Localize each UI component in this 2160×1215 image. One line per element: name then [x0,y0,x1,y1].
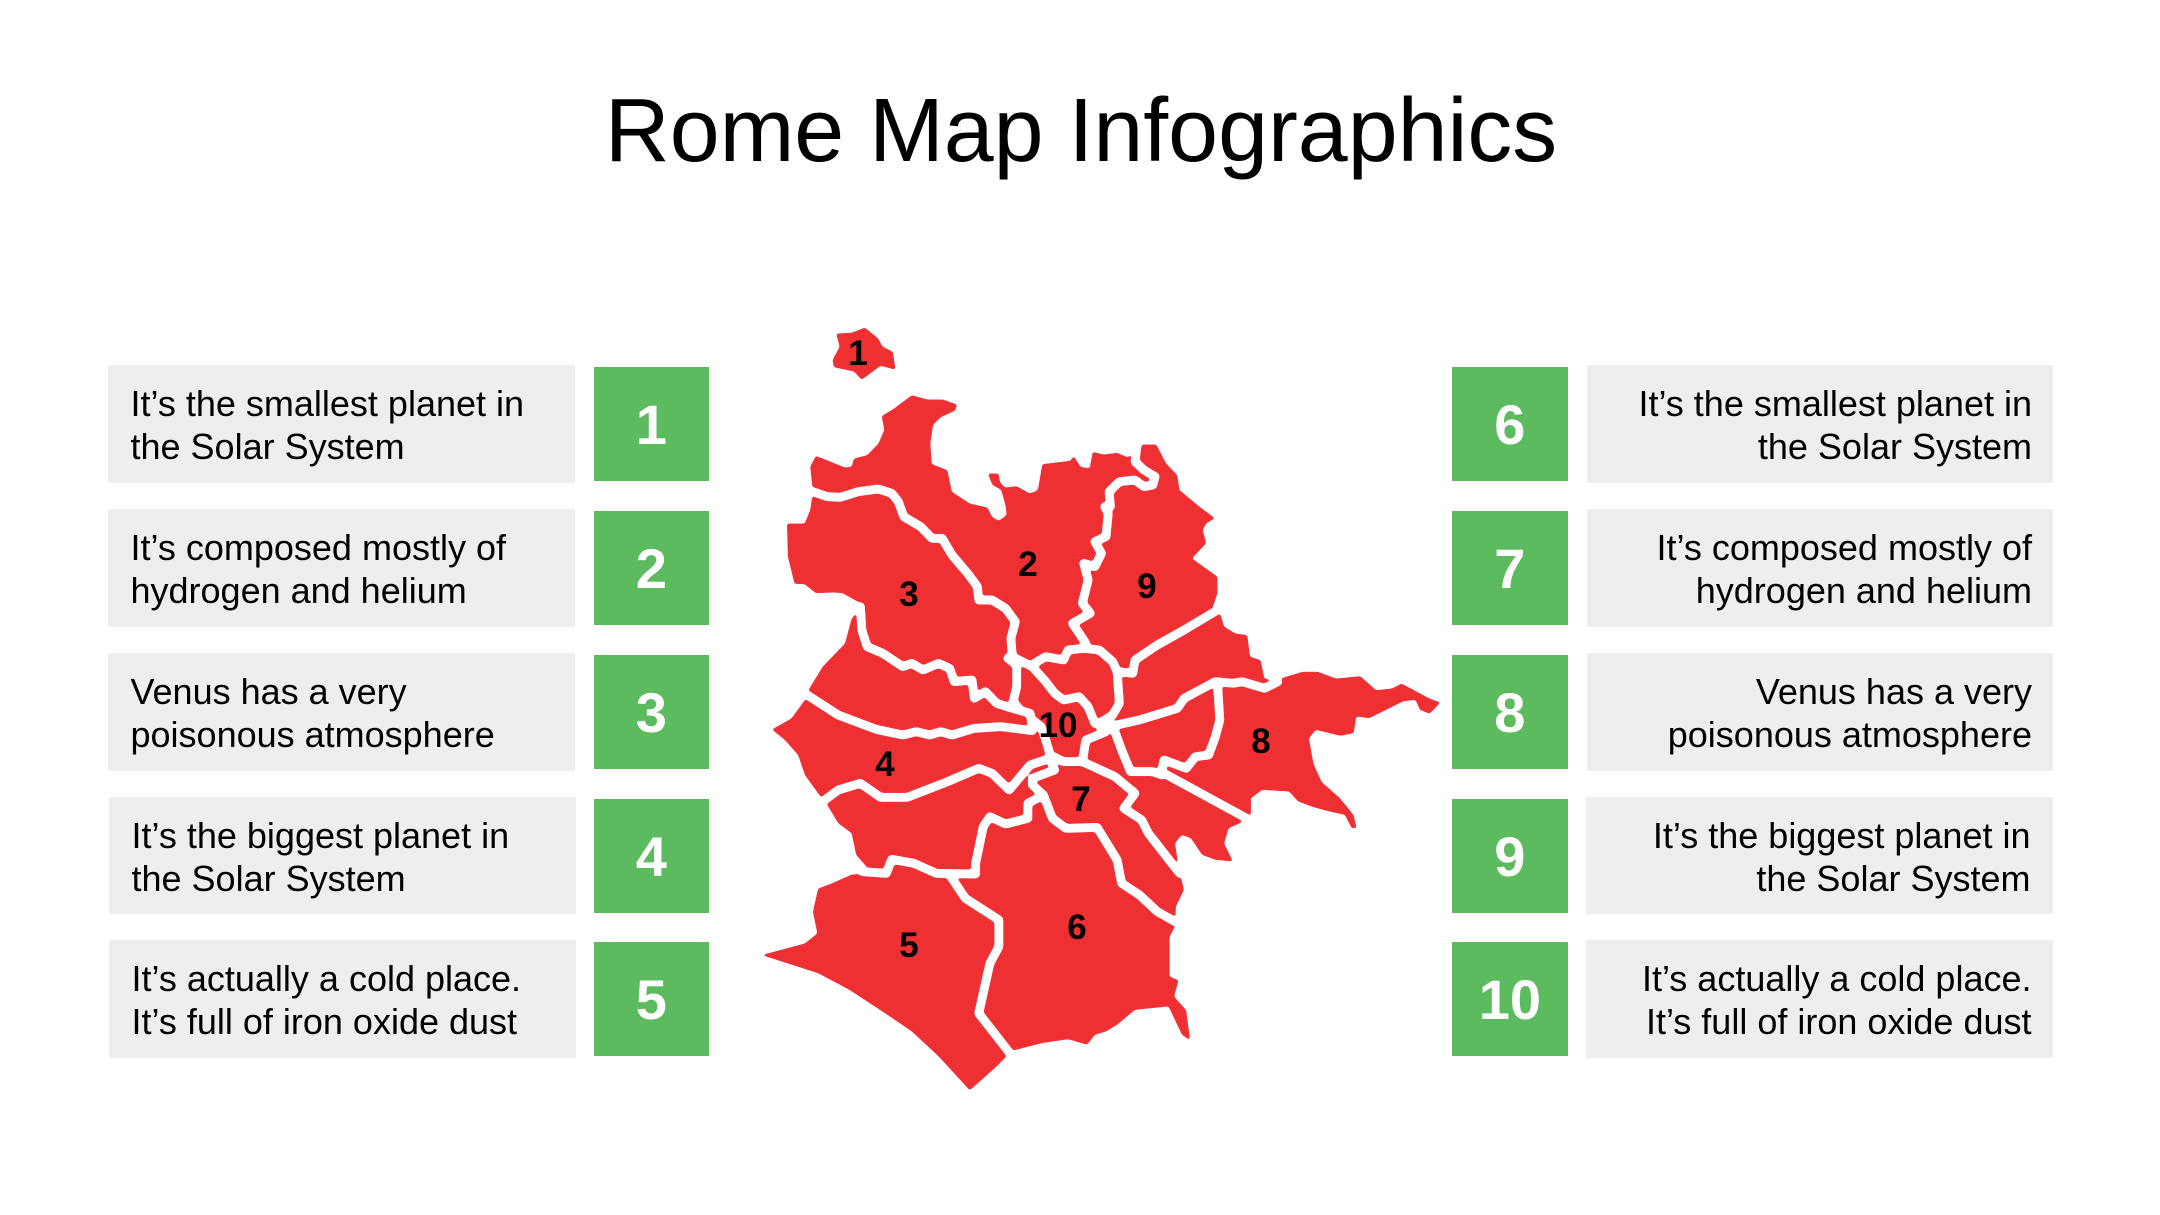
right item 6 [1452,365,2053,483]
text panel 8: Venus has a very poisonous atmosphere [1668,671,2032,755]
number badge 6: 6 [1494,393,1525,456]
number badge 7 [1452,511,1568,625]
text panel 2: It’s composed mostly of hydrogen and helium [130,527,506,611]
text panel 4: It’s the biggest planet in the Solar System [132,815,509,899]
map regions [740,300,1470,1120]
number badge 10: 10 [1479,968,1541,1031]
map district numbers [848,334,1271,965]
left item 3 [108,653,709,771]
text panel 3: Venus has a very poisonous atmosphere [130,671,495,755]
number badge 4 [594,798,709,912]
right item 8 [1452,653,2053,771]
map district numbers: 9 [1137,567,1157,606]
left item 4 [109,797,709,914]
number badge 2: 2 [636,537,667,600]
number badge 9: 9 [1494,824,1525,888]
map district numbers: 2 [1018,545,1038,584]
text panel 7: It’s composed mostly of hydrogen and helium [1656,527,2032,611]
number badge 1 [594,367,709,481]
text panel 8 [1587,653,2052,770]
number badge 3 [594,655,709,769]
text panel 7 [1587,509,2052,626]
number badge 4: 4 [636,824,667,888]
number badge 6 [1452,367,1568,481]
map district numbers: 8 [1251,722,1271,761]
map district numbers: 10 [1039,706,1077,745]
map district numbers: 7 [1071,780,1091,819]
text panel 1: It’s the smallest planet in the Solar System [130,383,524,467]
number badge 5: 5 [636,968,667,1031]
right item 10 [1452,940,2053,1058]
left item 1 [108,365,709,483]
left item 5 [109,940,709,1058]
text panel 6: It’s the smallest planet in the Solar System [1638,383,2032,467]
text panel 9: It’s the biggest planet in the Solar System [1653,815,2030,899]
number badge 8: 8 [1494,681,1525,744]
number badge 2 [594,511,709,625]
text panel 6 [1587,365,2052,482]
left item 2 [108,509,709,627]
map district numbers: 4 [875,745,895,784]
text panel 5 [109,940,576,1058]
number badge 5 [594,942,709,1056]
number badge 10 [1452,942,1568,1056]
text panel 3 [108,653,574,770]
text panel 10: It’s actually a cold place. It’s full of iron oxide dust [1642,958,2032,1042]
number badge 9 [1452,798,1568,912]
text panel 2 [108,509,574,626]
number badge 8 [1452,655,1568,769]
map district numbers: 5 [899,926,919,965]
title: Rome Map Infographics [605,81,1557,181]
region 1 island [832,327,896,380]
mainland [761,395,1441,1091]
text panel 4 [109,796,576,914]
number badge 7: 7 [1494,537,1525,600]
number badge 3: 3 [636,681,667,744]
map district numbers: 3 [899,575,919,614]
text panel 9 [1586,796,2052,914]
right item 9 [1452,797,2053,914]
text panel 1 [108,365,574,482]
text panel 10 [1586,940,2052,1058]
right item 7 [1452,509,2053,627]
map district numbers: 6 [1067,908,1087,947]
district borders [805,444,1278,1053]
number badge 1: 1 [636,393,667,456]
map district numbers: 1 [848,334,868,373]
text panel 5: It’s actually a cold place. It’s full of iron oxide dust [132,958,521,1042]
